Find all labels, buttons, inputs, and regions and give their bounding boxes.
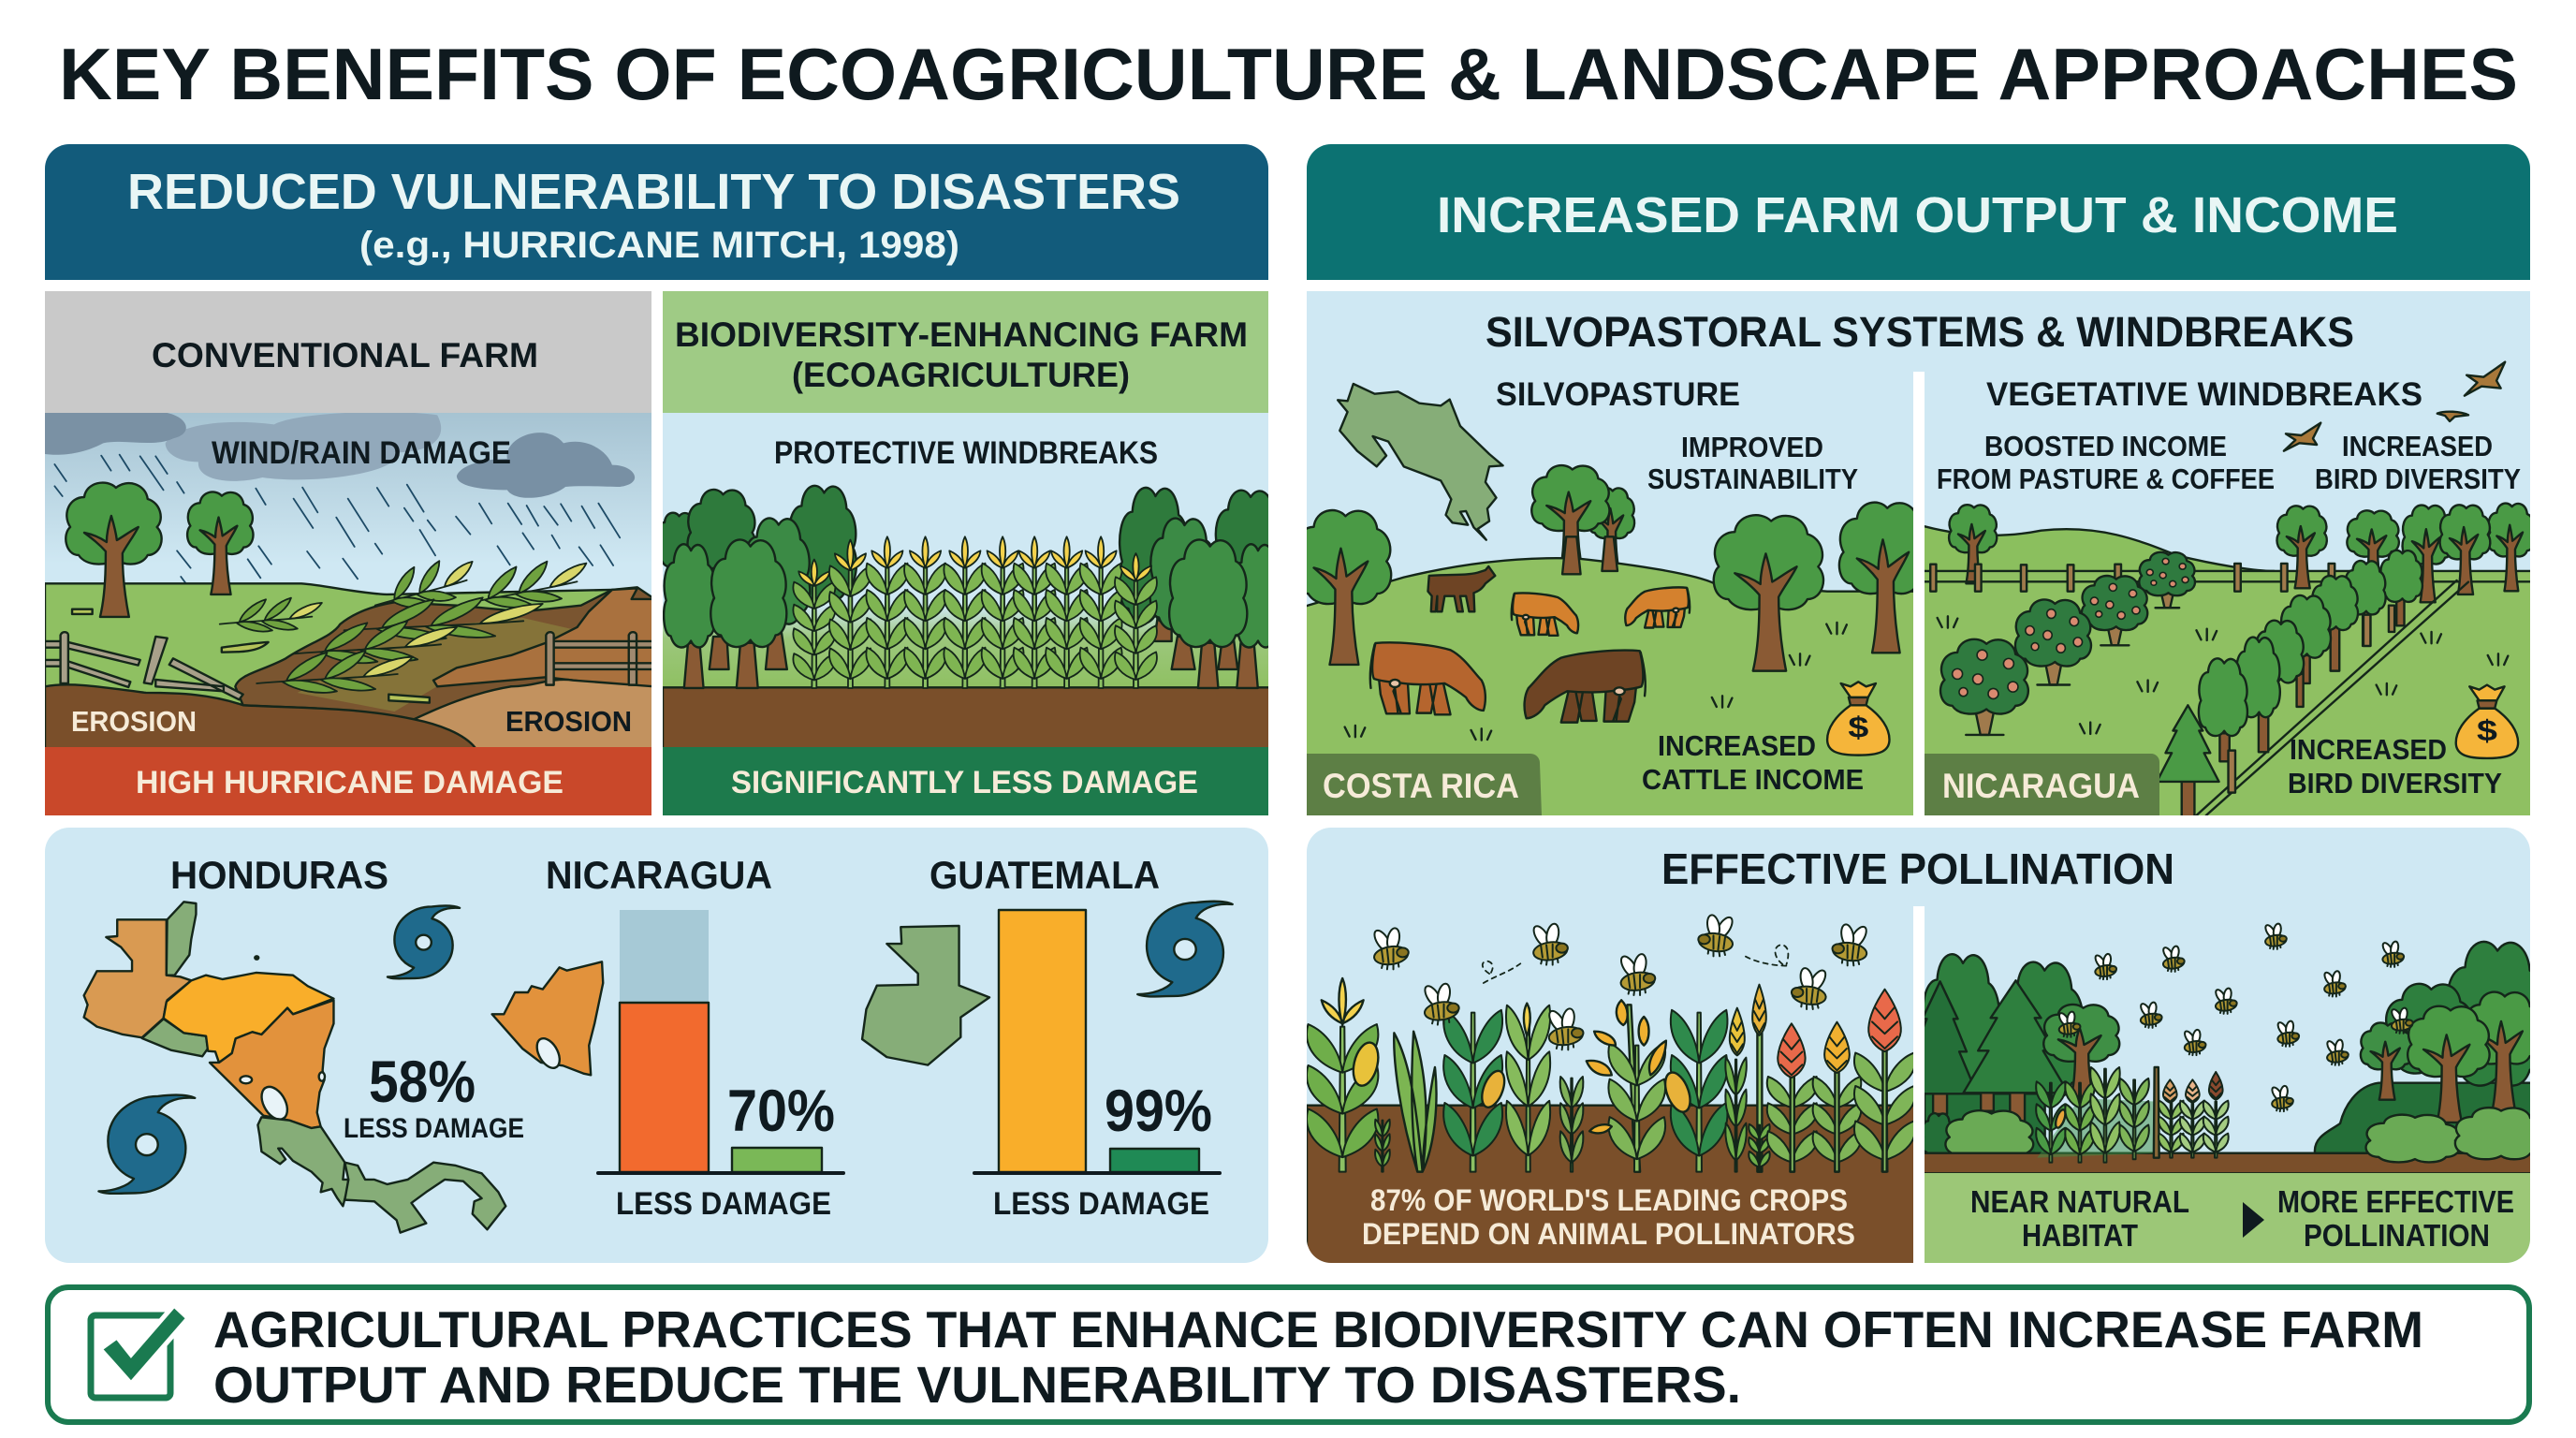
map: guatemala (862, 926, 989, 1065)
high damage label: HIGH HURRICANE DAMAGE (136, 765, 564, 800)
honduras percent: 58% (369, 1049, 476, 1115)
icon: money bag (1827, 682, 1889, 756)
wind rain damage label: WIND/RAIN DAMAGE (212, 435, 511, 471)
crops statistic line 1: 87% OF WORLD'S LEADING CROPS (1370, 1183, 1848, 1217)
panel: hurricane mitch country results (45, 828, 1268, 1263)
silvopastoral heading: SILVOPASTORAL SYSTEMS & WINDBREAKS (1486, 308, 2354, 356)
divider (1913, 372, 1925, 815)
icon: money bag (2456, 685, 2518, 758)
scene: vegetative windbreaks (1923, 362, 2535, 817)
pollination heading: EFFECTIVE POLLINATION (1661, 844, 2174, 893)
icon: bird small (2437, 412, 2468, 421)
panel: effective pollination (1307, 828, 2544, 1268)
fence right (546, 632, 655, 685)
header subtitle left: (e.g., HURRICANE MITCH, 1998) (359, 225, 959, 266)
dark soil (45, 684, 476, 749)
header: increased farm output and income (1307, 144, 2530, 280)
bee flight trails (1483, 945, 1791, 983)
guatemala caption: LESS DAMAGE (993, 1186, 1209, 1222)
coffee bushes (1940, 552, 2195, 735)
panel: silvopastoral systems and windbreaks (1295, 291, 2535, 817)
increased bird diversity line 1: INCREASED (2342, 430, 2493, 462)
guatemala percent: 99% (1105, 1078, 1212, 1144)
icon: money bag: $ (1848, 711, 1868, 744)
top tree row (2277, 504, 2534, 602)
diagonal windbreak row (2157, 550, 2422, 817)
broken fence left (45, 637, 243, 699)
silvopasture heading: SILVOPASTURE (1496, 376, 1740, 413)
conclusion line 2: OUTPUT AND REDUCE THE VULNERABILITY TO DISASTERS. (213, 1356, 1741, 1414)
header title right: INCREASED FARM OUTPUT & INCOME (1437, 187, 2398, 243)
biodiversity farm heading line 2: (ECOAGRICULTURE) (792, 356, 1130, 394)
conclusion callout (48, 1287, 2529, 1422)
cows (1370, 566, 1690, 723)
divider (1913, 906, 1925, 1263)
tree (66, 483, 162, 617)
left windbreak trees (656, 486, 856, 688)
scene: storm damaged farm (45, 412, 655, 749)
nicaragua caption: LESS DAMAGE (616, 1186, 831, 1222)
guatemala heading: GUATEMALA (929, 853, 1160, 897)
panel: biodiversity enhancing farm (656, 291, 1283, 815)
scene: near natural habitat (1903, 923, 2544, 1263)
habitat crops (2036, 1067, 2229, 1163)
erosion label left: EROSION (71, 705, 197, 738)
title: KEY BENEFITS OF ECOAGRICULTURE & LANDSCAPE APPROACHES (59, 33, 2518, 115)
near natural habitat line 2: HABITAT (2022, 1218, 2138, 1253)
diagonal fence (2196, 580, 2468, 815)
improved sustainability line 2: SUSTAINABILITY (1647, 462, 1858, 495)
icon: hurricane guatemala (1137, 902, 1233, 996)
nicaragua label: NICARAGUA (1942, 767, 2140, 805)
honduras caption: LESS DAMAGE (344, 1113, 524, 1144)
conclusion line 1: AGRICULTURAL PRACTICES THAT ENHANCE BIODIVERSITY CAN OFTEN INCREASE FARM (213, 1300, 2423, 1358)
protective windbreaks label: PROTECTIVE WINDBREAKS (774, 435, 1158, 471)
increased bird diversity lower line 1: INCREASED (2290, 733, 2447, 766)
corn row (793, 536, 1157, 688)
right forest (2315, 942, 2544, 1162)
icon: check box (91, 1305, 188, 1398)
eroded slope (235, 587, 655, 719)
increased bird diversity lower line 2: BIRD DIVERSITY (2288, 767, 2502, 800)
icon: bird (2284, 423, 2320, 451)
panel: conventional farm (45, 291, 655, 815)
increased bird diversity line 2: BIRD DIVERSITY (2315, 462, 2521, 495)
scene: crops and bees (1307, 915, 1917, 1268)
arrow (2243, 1202, 2264, 1238)
icon: money bag: $ (2477, 714, 2497, 747)
scene: windbreak farm (656, 412, 1283, 749)
less damage label: SIGNIFICANTLY LESS DAMAGE (731, 765, 1198, 800)
costa rica tab (1307, 754, 1542, 815)
bees (1371, 915, 1869, 1049)
boosted income line 1: BOOSTED INCOME (1984, 430, 2227, 462)
map: nicaragua (492, 961, 603, 1075)
scene: silvopasture (1295, 384, 1931, 817)
more effective pollination line 2: POLLINATION (2304, 1218, 2490, 1253)
map: central america and honduras hurricanes (84, 902, 603, 1233)
nicaragua tab (1925, 754, 2159, 815)
icon: hurricane large (98, 1095, 195, 1194)
crops statistic line 2: DEPEND ON ANIMAL POLLINATORS (1362, 1217, 1855, 1251)
honduras heading: HONDURAS (170, 853, 388, 897)
icon: hurricane small (388, 905, 460, 978)
costa rica label: COSTA RICA (1323, 767, 1519, 805)
habitat bees (2057, 923, 2414, 1111)
right windbreak trees (1119, 488, 1283, 688)
biodiversity farm heading line 1: BIODIVERSITY-ENHANCING FARM (675, 315, 1248, 354)
bar chart: nicaragua (598, 910, 843, 1173)
header: reduced vulnerability to disasters (45, 144, 1268, 280)
vegetative windbreaks heading: VEGETATIVE WINDBREAKS (1986, 376, 2422, 413)
increased cattle income line 2: CATTLE INCOME (1642, 763, 1864, 796)
bar chart: guatemala (974, 910, 1220, 1173)
icon: bird top (2465, 362, 2505, 396)
crop row (1307, 978, 1915, 1172)
conventional farm heading: CONVENTIONAL FARM (152, 336, 538, 374)
increased cattle income line 1: INCREASED (1658, 729, 1816, 762)
map: costa rica (1338, 384, 1503, 540)
less damage band (663, 747, 1268, 815)
erosion label right: EROSION (505, 705, 632, 738)
improved sustainability line 1: IMPROVED (1681, 431, 1823, 463)
tree (187, 492, 253, 594)
nicaragua heading: NICARAGUA (546, 853, 772, 897)
high damage band (45, 747, 651, 815)
nicaragua percent: 70% (727, 1078, 835, 1144)
fence (1925, 571, 2535, 581)
near natural habitat line 1: NEAR NATURAL (1970, 1184, 2189, 1219)
boosted income line 2: FROM PASTURE & COFFEE (1937, 462, 2275, 495)
header title left: REDUCED VULNERABILITY TO DISASTERS (127, 164, 1180, 220)
habitat caption band (1925, 1173, 2530, 1263)
left forest (1925, 953, 2121, 1152)
fallen crops (374, 560, 474, 608)
more effective pollination line 1: MORE EFFECTIVE (2277, 1184, 2514, 1219)
